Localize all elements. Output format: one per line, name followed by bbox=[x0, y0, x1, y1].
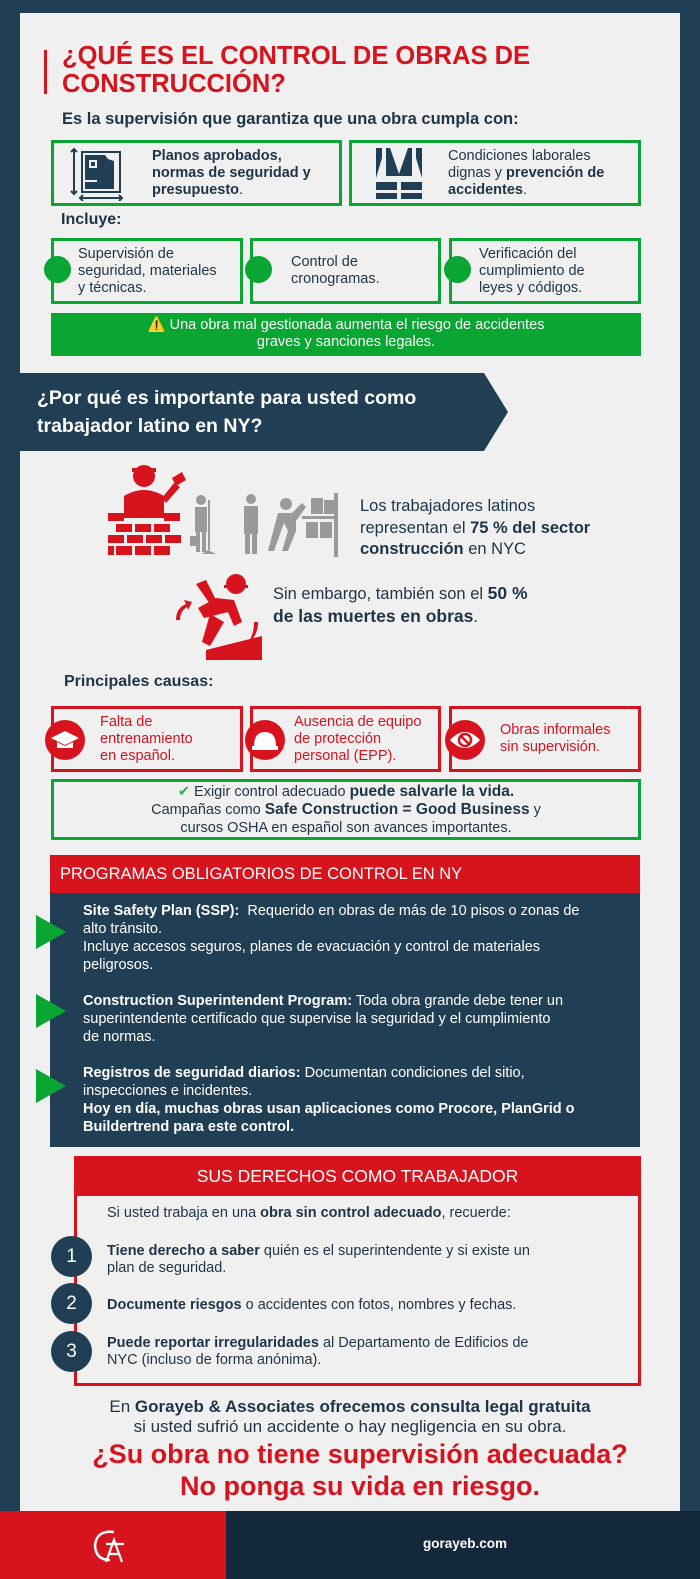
box: cronogramas: Control de bbox=[291, 254, 358, 270]
warning banner bbox=[51, 313, 641, 356]
illustration: falling worker bbox=[176, 574, 262, 660]
box: supervision: seguridad, materiales bbox=[78, 263, 217, 279]
box: condiciones bbox=[349, 140, 641, 206]
panel: programas obligatorios: PROGRAMAS OBLIGATORIOS DE CONTROL EN NY bbox=[60, 865, 462, 883]
program 2 bbox=[83, 993, 563, 1045]
warning banner: ⚠️ Una obra mal gestionada aumenta el riesgo de accidentes bbox=[148, 317, 544, 333]
section banner: por que: ¿Por qué es importante para usted como bbox=[37, 387, 416, 409]
number 1 bbox=[51, 1236, 92, 1277]
logo bbox=[94, 1530, 124, 1562]
icon: arrow 3 bbox=[36, 1069, 66, 1103]
box: planos: Planos aprobados, bbox=[152, 148, 282, 164]
cause box 3 bbox=[449, 706, 641, 772]
stat: 50%: Sin embargo, también son el 50 % bbox=[273, 583, 528, 603]
box: supervision: Supervisión de bbox=[78, 246, 174, 262]
box: cronogramas bbox=[250, 238, 441, 304]
cause box 3: Obras informales bbox=[500, 722, 610, 738]
program 1: alto tránsito. bbox=[83, 921, 162, 937]
icon: green dot 1 bbox=[44, 256, 71, 283]
icon: vest bbox=[376, 148, 422, 199]
program 3: Buildertrend para este control. bbox=[83, 1119, 294, 1135]
subtitle: Es la supervisión que garantiza que una obra cumpla con: bbox=[62, 110, 519, 128]
section banner: por que: trabajador latino en NY? bbox=[37, 415, 262, 437]
cause box 2: personal (EPP). bbox=[294, 748, 396, 764]
icon: arrow 2 bbox=[36, 994, 66, 1028]
icon: blueprint bbox=[70, 148, 124, 201]
number 2: 2 bbox=[66, 1293, 77, 1314]
program 3: Hoy en día, muchas obras usan aplicaciones como Procore, PlanGrid o bbox=[83, 1101, 575, 1117]
stat: 75%: Los trabajadores latinos bbox=[360, 497, 535, 515]
program 1: Site Safety Plan (SSP): Requerido en obras de más de 10 pisos o zonas de bbox=[83, 903, 580, 919]
footer bbox=[0, 1511, 700, 1579]
box: planos bbox=[51, 140, 342, 206]
cause box 1: entrenamiento bbox=[100, 731, 193, 747]
stat: 50% bbox=[273, 583, 528, 626]
icon: hard hat bbox=[245, 720, 285, 760]
callout: exigir control: cursos OSHA en español son avances importantes. bbox=[180, 820, 512, 836]
box: verificacion bbox=[449, 238, 641, 304]
icon: eye blocked bbox=[445, 720, 485, 760]
number 1: 1 bbox=[66, 1246, 77, 1267]
box: condiciones: dignas y prevención de bbox=[448, 165, 604, 181]
number 2 bbox=[51, 1283, 92, 1324]
callout: exigir control: Campañas como Safe Construction = Good Business y bbox=[151, 801, 541, 818]
icon: arrow 1 bbox=[36, 915, 66, 949]
stat: 50%: de las muertes en obras. bbox=[273, 606, 478, 626]
text: gorayeb consulta: En Gorayeb & Associates ofrecemos consulta legal gratuita bbox=[109, 1397, 591, 1416]
box: planos: presupuesto. bbox=[152, 182, 243, 198]
call to action: ¿Su obra no tiene supervisión adecuada? bbox=[92, 1439, 628, 1469]
stat: 75%: construcción en NYC bbox=[360, 540, 526, 558]
call to action bbox=[92, 1439, 628, 1501]
illustration: workers bbox=[108, 465, 338, 557]
panel: derechos: Tiene derecho a saber quién es el superintendente y si existe un bbox=[107, 1243, 530, 1259]
call to action: No ponga su vida en riesgo. bbox=[180, 1471, 540, 1501]
panel: derechos: plan de seguridad. bbox=[107, 1260, 226, 1276]
program 2: de normas. bbox=[83, 1029, 156, 1045]
warning banner: graves y sanciones legales. bbox=[257, 334, 435, 350]
cause box 2 bbox=[250, 706, 441, 772]
panel: derechos: Puede reportar irregularidades al Departamento de Edificios de bbox=[107, 1335, 529, 1351]
box: condiciones: Condiciones laborales bbox=[448, 148, 591, 164]
cause box 3: sin supervisión. bbox=[500, 739, 600, 755]
number 3 bbox=[51, 1331, 92, 1372]
cause box 1: en español. bbox=[100, 748, 175, 764]
box: verificacion: Verificación del bbox=[479, 246, 577, 262]
callout: exigir control: ✔ Exigir control adecuado puede salvarle la vida. bbox=[178, 783, 514, 800]
program 3: Registros de seguridad diarios: Documentan condiciones del sitio, bbox=[83, 1065, 525, 1081]
box: supervision bbox=[51, 238, 243, 304]
box: cronogramas: cronogramas. bbox=[291, 271, 380, 287]
icon: green dot 3 bbox=[444, 256, 471, 283]
icon: graduation cap bbox=[45, 720, 85, 760]
panel: derechos bbox=[74, 1156, 641, 1386]
section banner: por que bbox=[20, 373, 508, 451]
program 3: inspecciones e incidentes. bbox=[83, 1083, 252, 1099]
program 2: superintendente certificado que supervise la seguridad y el cumplimiento bbox=[83, 1011, 550, 1027]
box: verificacion: cumplimiento de bbox=[479, 263, 585, 279]
program 2: Construction Superintendent Program: Toda obra grande debe tener un bbox=[83, 993, 563, 1009]
callout: exigir control bbox=[51, 779, 641, 840]
program 1: Incluye accesos seguros, planes de evacuación y control de materiales bbox=[83, 939, 540, 955]
box: planos: normas de seguridad y bbox=[152, 165, 311, 181]
cause box 2: Ausencia de equipo bbox=[294, 714, 421, 730]
cause box 1: Falta de bbox=[100, 714, 152, 730]
box: verificacion: leyes y códigos. bbox=[479, 280, 582, 296]
panel: derechos: SUS DERECHOS COMO TRABAJADOR bbox=[197, 1166, 518, 1186]
panel: programas obligatorios bbox=[50, 855, 640, 1147]
box: supervision: y técnicas. bbox=[78, 280, 146, 296]
panel: derechos: Si usted trabaja en una obra sin control adecuado, recuerde: bbox=[107, 1205, 511, 1221]
program 3 bbox=[83, 1065, 575, 1135]
icon: green dot 2 bbox=[245, 256, 272, 283]
title: ¿QUÉ ES EL CONTROL DE OBRAS DE bbox=[62, 42, 530, 70]
stat: 75% bbox=[360, 497, 590, 558]
heading: principales causas: Principales causas: bbox=[64, 673, 213, 690]
url: gorayeb.com bbox=[423, 1536, 507, 1551]
heading: incluye: Incluye: bbox=[61, 211, 121, 228]
title: CONSTRUCCIÓN? bbox=[62, 70, 286, 98]
text: gorayeb consulta bbox=[109, 1397, 591, 1436]
panel: derechos: NYC (incluso de forma anónima). bbox=[107, 1352, 321, 1368]
program 1 bbox=[83, 903, 580, 973]
title bbox=[44, 41, 530, 98]
program 1: peligrosos. bbox=[83, 957, 153, 973]
text: gorayeb consulta: si usted sufrió un accidente o hay negligencia en su obra. bbox=[134, 1417, 566, 1436]
panel: derechos: Documente riesgos o accidentes con fotos, nombres y fechas. bbox=[107, 1297, 516, 1313]
cause box 2: de protección bbox=[294, 731, 381, 747]
stat: 75%: representan el 75 % del sector bbox=[360, 518, 590, 536]
box: condiciones: accidentes. bbox=[448, 182, 527, 198]
number 3: 3 bbox=[66, 1341, 77, 1362]
cause box 1 bbox=[51, 706, 243, 772]
